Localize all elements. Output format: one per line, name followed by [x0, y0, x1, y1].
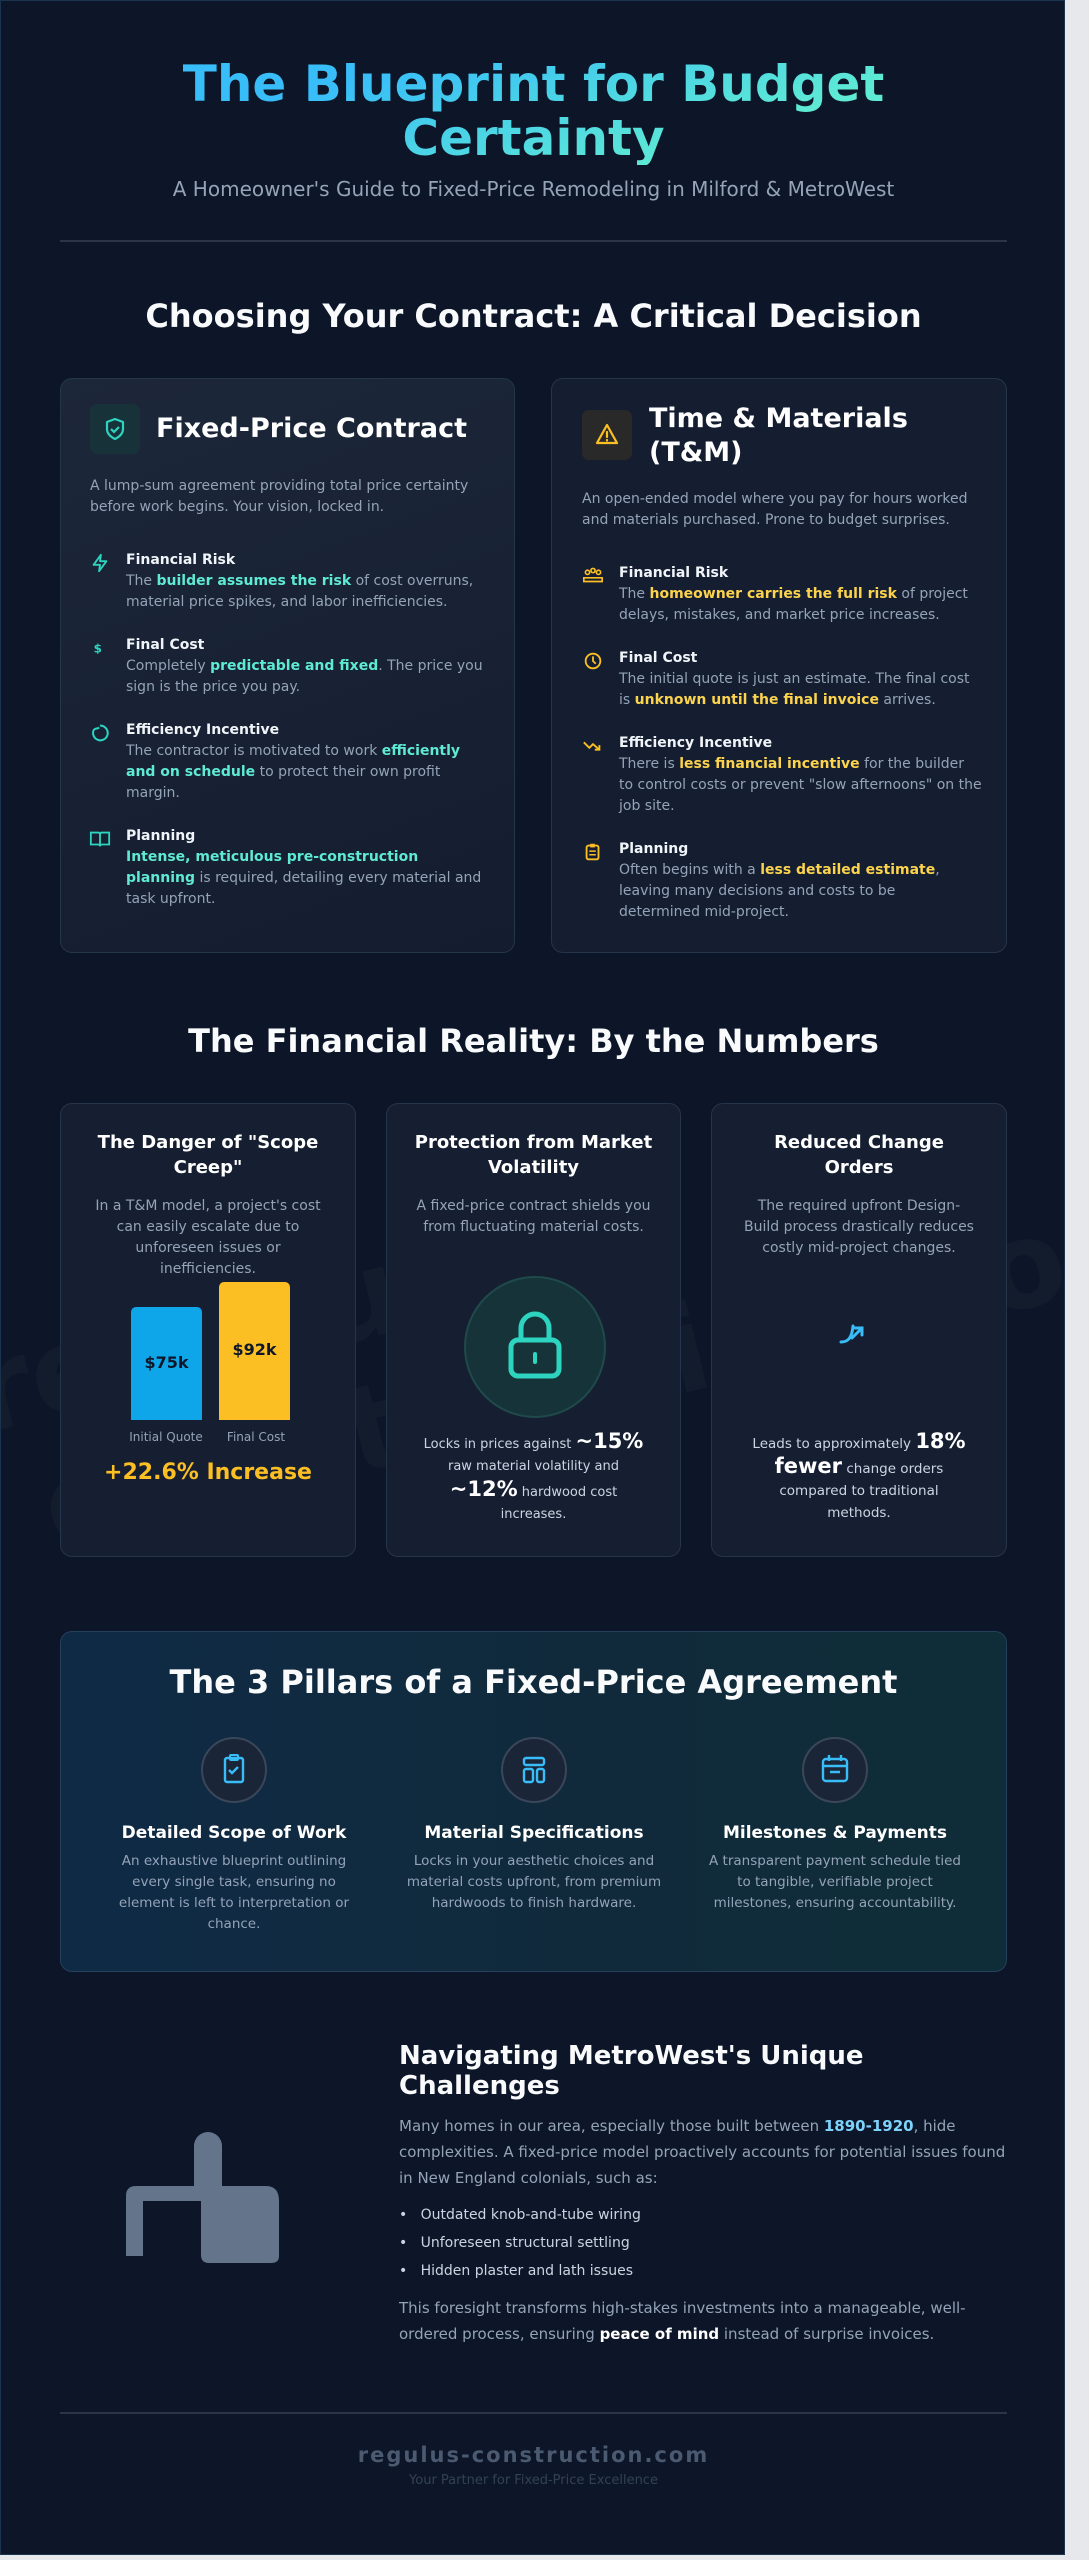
panel: fixed-price contract — [60, 378, 515, 953]
item: planning — [90, 828, 481, 907]
closing paragraph: This foresight transforms high-stakes investments into a manageable, well-ordered process, ensuring peace of mind instead of surprise invoices. — [399, 2299, 966, 2343]
item: final cost: The initial quote is just an estimate. The final cost is unknown until the final invoice arrives. — [619, 671, 970, 708]
card title: (T&M) — [649, 437, 743, 468]
icon: warning — [582, 410, 632, 460]
item: efficiency incentive — [92, 722, 460, 801]
item: efficiency incentive: Efficiency Incentive — [619, 735, 772, 751]
icon: merge arrow — [840, 1324, 864, 1344]
stat description: The required upfront Design- — [758, 1198, 960, 1214]
pillar: milestones — [709, 1737, 961, 1911]
stat description: A fixed-price contract shields you from fluctuating material costs. — [416, 1198, 651, 1235]
subtitle: A Homeowner's Guide to Fixed-Price Remodeling in Milford & MetroWest — [173, 177, 894, 201]
card description: An open-ended model where you pay for hours worked and materials purchased. Prone to budget surprises. — [582, 491, 967, 528]
panel: change orders — [711, 1103, 1007, 1557]
panel: time & materials — [551, 378, 1007, 953]
item: final cost: $ — [94, 642, 102, 656]
stat title: Protection from Market Volatility — [415, 1132, 652, 1178]
stat title: The Danger of "Scope Creep" — [98, 1132, 318, 1178]
pillar: material specifications: Locks in your aesthetic choices and material costs upfront, from premium hardwoods to finish hardware. — [407, 1853, 661, 1911]
icon: lock — [464, 1276, 606, 1418]
bar chart: Final Cost — [227, 1430, 285, 1444]
title: Certainty — [402, 109, 665, 167]
item: planning — [586, 841, 940, 920]
pillar: milestones: A transparent payment schedule tied to tangible, verifiable project milestones, ensuring accountability. — [709, 1853, 961, 1911]
item: efficiency incentive: There is less financial incentive for the builder to control costs or prevent "slow afternoons" on the job site. — [619, 756, 982, 814]
item: financial risk: Financial Risk — [126, 552, 235, 568]
panel: market volatility — [386, 1103, 681, 1557]
title: The Blueprint for Budget — [183, 55, 884, 113]
footer — [358, 2443, 709, 2488]
panel: 3 pillars — [60, 1631, 1007, 1972]
pillar: milestones: Milestones & Payments — [723, 1823, 947, 1843]
pillar: scope of work: An exhaustive blueprint outlining every single task, ensuring no element is left to interpretation or chance. — [119, 1853, 349, 1932]
item: financial risk — [92, 552, 473, 610]
stat: increase: +22.6% Increase — [104, 1460, 312, 1485]
bullet list: • Hidden plaster and lath issues — [399, 2263, 633, 2279]
heading: choosing your contract: Choosing Your Contract: A Critical Decision — [145, 297, 922, 335]
icon: calendar — [802, 1737, 868, 1803]
card title: Time & Materials — [649, 403, 908, 434]
card title — [649, 403, 908, 468]
item: final cost — [584, 650, 970, 708]
bullet list — [399, 2207, 641, 2279]
stat title: Reduced Change Orders — [774, 1132, 944, 1178]
bar chart — [129, 1282, 290, 1444]
item: financial risk — [583, 565, 968, 623]
stat text: Leads to approximately 18% fewer change orders compared to traditional methods. — [752, 1429, 966, 1521]
heading: financial reality: The Financial Reality: By the Numbers — [188, 1022, 879, 1060]
heading: Navigating MetroWest's Unique Challenges — [399, 2041, 864, 2101]
icon: layout — [501, 1737, 567, 1803]
stat description: In a T&M model, a project's cost can easily escalate due to unforeseen issues or inefficiencies. — [95, 1198, 321, 1277]
stat text: Locks in prices against ~15% raw material volatility and ~12% hardwood cost increases. — [424, 1429, 643, 1522]
bar chart: $92k — [232, 1340, 277, 1359]
panel: scope creep — [60, 1103, 356, 1557]
pillar: scope of work — [119, 1737, 350, 1932]
item: financial risk: The builder assumes the risk of cost overruns, material price spikes, and labor inefficiencies. — [126, 573, 473, 610]
section: MetroWest challenges — [398, 2041, 1005, 2343]
bullet list: • Unforeseen structural settling — [399, 2235, 630, 2251]
item: final cost: Final Cost — [619, 650, 697, 666]
pillar: scope of work: Detailed Scope of Work — [122, 1823, 346, 1843]
stat description — [744, 1198, 974, 1256]
bullet list: • Outdated knob-and-tube wiring — [399, 2207, 641, 2223]
item: efficiency incentive: Efficiency Incentive — [126, 722, 279, 738]
stat description: Build process drastically reduces costly mid-project changes. — [744, 1219, 974, 1256]
item: planning: Planning — [126, 828, 195, 844]
item: efficiency incentive: The contractor is motivated to work efficiently and on schedule to protect their own profit margin. — [126, 743, 460, 801]
item: financial risk: Financial Risk — [619, 565, 728, 581]
item: planning: Planning — [619, 841, 688, 857]
pillar: material specifications — [407, 1737, 661, 1911]
icon: paint roller — [126, 2132, 279, 2263]
card description: A lump-sum agreement providing total price certainty before work begins. Your vision, locked in. — [90, 478, 468, 515]
item: final cost: Completely predictable and fixed. The price you sign is the price you pay. — [126, 658, 483, 695]
bar chart: $75k — [144, 1353, 189, 1372]
item: final cost — [94, 637, 483, 695]
item: final cost: Final Cost — [126, 637, 204, 653]
icon: clipboard check — [201, 1737, 267, 1803]
pillar: material specifications: Material Specifications — [424, 1823, 644, 1843]
title — [1, 57, 1066, 165]
pillars heading: The 3 Pillars of a Fixed-Price Agreement — [170, 1663, 897, 1701]
bar chart: Initial Quote — [129, 1430, 203, 1444]
item: financial risk: The homeowner carries the full risk of project delays, mistakes, and market price increases. — [619, 586, 968, 623]
card title: Fixed-Price Contract — [156, 413, 467, 444]
paragraph: Many homes in our area, especially those built between 1890-1920, hide complexities. A fixed-price model proactively accounts for potential issues found in New England colonials, such as: — [399, 2117, 1005, 2187]
item: planning: Often begins with a less detailed estimate, leaving many decisions and costs to be determined mid-project. — [619, 862, 940, 920]
item: efficiency incentive — [583, 735, 982, 814]
footer: Your Partner for Fixed-Price Excellence — [409, 2473, 658, 2488]
icon: shield — [90, 404, 140, 454]
item: planning: Intense, meticulous pre-construction planning is required, detailing every material and task upfront. — [126, 849, 481, 907]
footer: regulus-construction.com — [358, 2443, 709, 2467]
